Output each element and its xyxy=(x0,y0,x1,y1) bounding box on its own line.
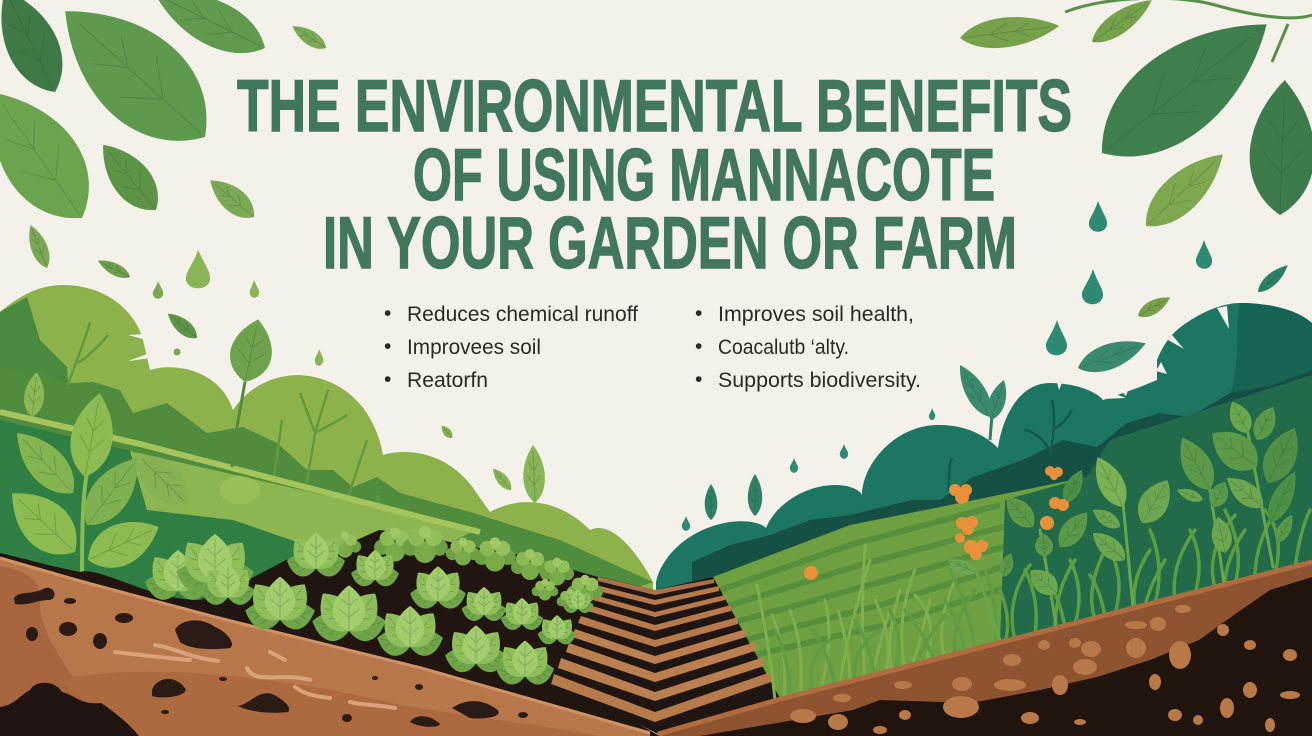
soil: dark topsoil under seedlings xyxy=(0,530,660,736)
front row: lettuces xyxy=(142,532,595,688)
bullet list: left column xyxy=(384,302,638,392)
terraced furrows xyxy=(551,577,781,734)
back row: broccoli-like plants xyxy=(329,526,603,610)
right hills xyxy=(656,303,1312,620)
falling leaves xyxy=(705,261,1292,520)
hill notches xyxy=(1057,306,1287,399)
leaf: middle xyxy=(88,133,171,222)
bullet list: right column: • xyxy=(695,302,702,325)
hill notches xyxy=(128,334,151,361)
leaf: lime xyxy=(1133,141,1236,240)
water drops xyxy=(682,201,1212,531)
bullet list: right column xyxy=(695,302,921,392)
title xyxy=(237,66,1072,284)
left soil cross-section xyxy=(0,558,650,736)
leaf: top xyxy=(145,0,275,68)
striped field xyxy=(713,375,1312,702)
bullet list: right column: Supports biodiversity. xyxy=(718,369,921,392)
bullet list: left column: Reatorfn xyxy=(407,369,488,392)
tall leafy plants xyxy=(945,397,1308,640)
leaf: right xyxy=(1248,79,1312,216)
leaf: left xyxy=(0,71,113,240)
hill saplings xyxy=(68,322,378,553)
leaves: top xyxy=(958,0,1158,53)
bullet list: right column: • xyxy=(695,368,702,391)
bullet list: left column: • xyxy=(384,302,391,325)
clay streaks xyxy=(115,645,395,708)
small falling leaves xyxy=(23,20,330,366)
leaf: dark corner xyxy=(0,0,78,103)
title line 2: OF USING MANNACOTE xyxy=(413,135,995,216)
dirt clods xyxy=(0,588,528,736)
bullet list: right column: Improves soil health, xyxy=(718,303,914,326)
left hills xyxy=(0,285,653,620)
orange flowers xyxy=(804,466,1069,580)
title line 3: IN YOUR GARDEN OR FARM xyxy=(323,203,1017,284)
leaf: large xyxy=(35,0,235,170)
left sprouts and falling leaves xyxy=(225,315,546,503)
top-right foliage xyxy=(682,0,1312,531)
top-left foliage xyxy=(0,0,330,366)
pebbles xyxy=(790,605,1300,734)
bullet list: right column: Coacalutb ‘alty. xyxy=(718,336,849,359)
bullet list: left column: Improvees soil xyxy=(407,336,541,359)
right soil cross-section xyxy=(658,562,1312,736)
branch xyxy=(1065,0,1312,62)
bullet list: left column: • xyxy=(384,335,391,358)
main left plant xyxy=(0,371,202,583)
leaf: big xyxy=(1076,0,1293,186)
right grasses xyxy=(757,397,1310,700)
planted band and dark ground xyxy=(0,412,560,640)
bullet list: left column: • xyxy=(384,368,391,391)
bullet list: right column: • xyxy=(695,335,702,358)
lettuce rows xyxy=(142,526,603,688)
bullet list: left column: Reduces chemical runoff xyxy=(407,303,638,326)
